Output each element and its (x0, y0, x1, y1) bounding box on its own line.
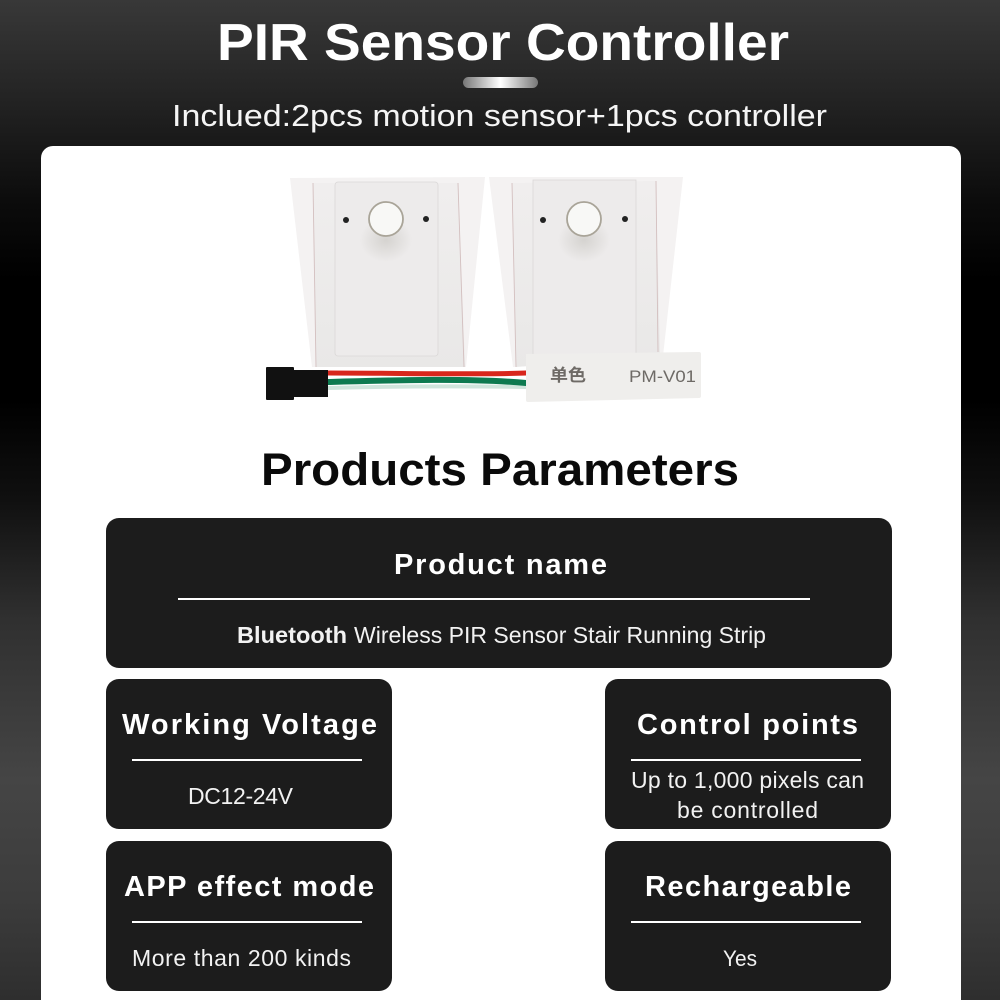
icon: controller module (526, 352, 701, 402)
subtitle: Inclued:2pcs motion sensor+1pcs controller (172, 98, 827, 133)
panel: working voltage (106, 679, 392, 829)
text: control points value: Up to 1,000 pixels can (631, 767, 864, 793)
text: effect mode value: More than 200 kinds (132, 945, 351, 971)
icon: wires (328, 373, 526, 388)
title: PIR Sensor Controller (217, 14, 789, 72)
heading: control points: Control points (637, 709, 858, 741)
heading: rechargeable: Rechargeable (645, 871, 851, 903)
panel: control points (605, 679, 891, 829)
text: control points value (631, 767, 864, 823)
icon: black connector (266, 367, 328, 400)
title accent bar (463, 77, 538, 88)
panel: rechargeable (605, 841, 891, 991)
text: product name value: Bluetooth (237, 622, 347, 648)
icon: controller module: PM-V01 (629, 367, 696, 386)
panel: white content card (41, 146, 961, 1000)
heading: working voltage: Working Voltage (122, 709, 377, 741)
icon: left motion sensor (290, 177, 485, 367)
icon: controller module: 单色 (550, 365, 586, 385)
text: rechargeable value: Yes (723, 946, 757, 971)
heading: app effect mode: APP effect mode (124, 871, 374, 903)
text: voltage value: DC12-24V (188, 783, 294, 809)
icon: right motion sensor (489, 177, 683, 367)
text: control points value: be controlled (677, 797, 818, 823)
heading: products parameters: Products Parameters (261, 444, 739, 495)
text: product description: Wireless PIR Sensor Stair Running Strip (354, 622, 766, 648)
panel: product name (106, 518, 892, 668)
panel: app effect mode (106, 841, 392, 991)
product photo: two sensors and controller (266, 177, 701, 402)
heading: product name: Product name (394, 549, 607, 581)
